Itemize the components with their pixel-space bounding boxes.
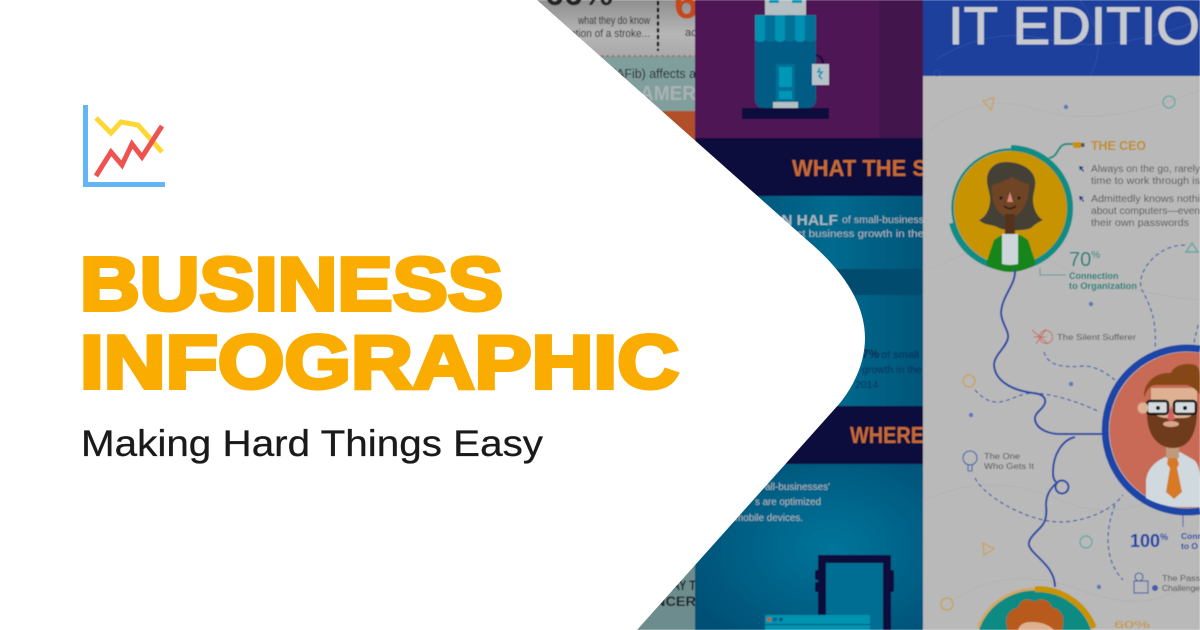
panel: small business infographic: WHERE: [850, 422, 924, 448]
cable to The CEO label: [1049, 142, 1084, 158]
icon: triangle outline: [983, 98, 994, 110]
stat: 70 percent: 70: [1069, 249, 1091, 271]
subtitle: Making Hard Things Easy: [81, 423, 544, 464]
person: bearded man avatar: [1105, 348, 1200, 512]
icon: password lock: [1134, 573, 1158, 593]
icon: dots and rings: [941, 302, 1101, 610]
text: the password challenger: Challenge: [1162, 583, 1200, 593]
panel: small business infographic: of small: [881, 349, 919, 361]
text: CEO notes: about computers—even: [1091, 206, 1200, 217]
dashed connectors: [975, 245, 1198, 580]
panel: small business infographic: mobile devices.: [735, 512, 803, 524]
icon: triangle teal: [1186, 243, 1198, 252]
icon: light bulb: [963, 451, 977, 471]
text: the one who gets it: The One: [984, 451, 1020, 461]
text: the password challenger: [1162, 573, 1200, 593]
blue connecting line: [994, 270, 1102, 587]
panel: small business infographic: 7%: [862, 347, 880, 361]
title: [80, 242, 679, 404]
person: CEO avatar: [952, 148, 1070, 272]
panel: small business infographic: s are optimized: [755, 496, 821, 508]
panel: medical infographic: [530, 0, 698, 630]
panel: medical infographic: what they do know: [577, 15, 650, 27]
text: CEO notes: [1079, 164, 1200, 229]
panel: medical infographic: AMER: [640, 83, 697, 105]
title: BUSINESS: [80, 242, 503, 326]
panel: small business infographic: all-businesses': [765, 481, 830, 493]
panel: small business infographic: of small-business: [842, 214, 924, 226]
panel: small business infographic: growth in the: [862, 364, 922, 376]
person: curly hair avatar: [978, 589, 1094, 630]
stat: 100 percent: 100: [1130, 531, 1160, 551]
text: The CEO: THE CEO: [1091, 139, 1146, 153]
panel: medical infographic: AY T: [672, 577, 696, 593]
text: the password challenger: The Pass: [1162, 573, 1200, 583]
panel: small business infographic: ect business growth in the: [790, 228, 924, 240]
panel: white arrow shape: [0, 0, 865, 630]
icon: silent sufferer: [1032, 329, 1052, 344]
panel: small business infographic: 2014: [855, 379, 879, 391]
icon: line chart: [83, 105, 165, 187]
text: the silent sufferer: The Silent Sufferer: [1057, 332, 1136, 342]
text: the one who gets it: [984, 451, 1035, 471]
text: CEO notes: Always on the go, rarely: [1091, 164, 1200, 175]
text: CEO notes: Admittedly knows nothi: [1091, 194, 1200, 205]
stat: 70 percent: %: [1091, 250, 1100, 261]
panel: small business infographic: [695, 0, 927, 630]
icon: phone and browser window: [765, 555, 894, 630]
stat: 70 percent: to Organization: [1069, 281, 1137, 291]
text: CEO notes: their own passwords: [1091, 218, 1189, 229]
panel: small business infographic: WHAT THE S: [792, 155, 927, 181]
icon: storefront: [742, 0, 829, 119]
text: CEO notes: time to work through is: [1091, 176, 1200, 187]
panel: medical infographic: (AFib) affects a: [612, 67, 696, 81]
panel: small business infographic: AN HALF: [770, 213, 838, 229]
background: infographic collage: [530, 0, 1200, 630]
icon: dot: [1064, 105, 1068, 109]
stat: 100 percent: %: [1160, 532, 1168, 542]
icon: ring: [1163, 96, 1175, 108]
text: the one who gets it: Who Gets It: [984, 461, 1035, 471]
panel: IT edition infographic: [923, 0, 1200, 630]
stat: 100 percent: [1130, 512, 1200, 551]
stat: 100 percent: to O: [1181, 541, 1198, 551]
title: INFOGRAPHIC: [80, 320, 679, 404]
stat: 70 percent: [1040, 249, 1137, 291]
panel: medical infographic: NCER: [655, 593, 696, 609]
panel: medical infographic: ption of a stroke...: [570, 28, 650, 40]
panel: medical infographic: ac: [685, 27, 697, 39]
stat: 70 percent: Connection: [1069, 271, 1118, 281]
